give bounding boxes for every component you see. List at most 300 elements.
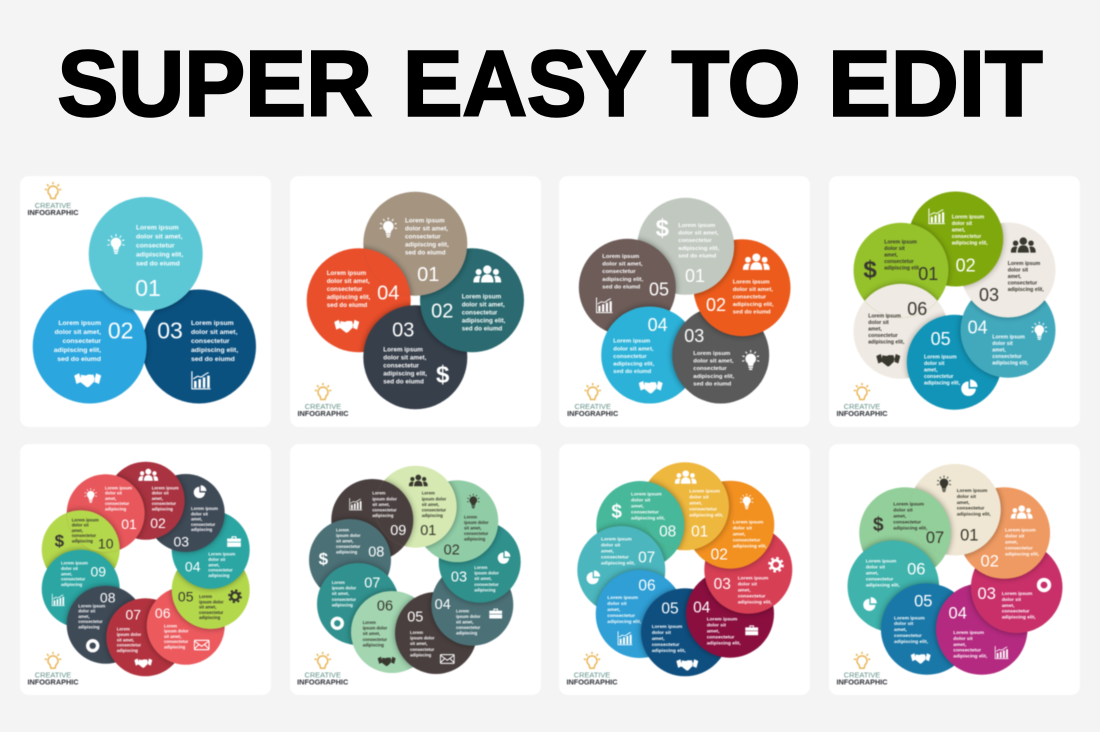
text 03: Lorem ipsum	[383, 347, 423, 354]
panel: eight-step circle diagram	[559, 444, 810, 695]
text 05: ipsum dolor	[199, 599, 224, 604]
text 03: consectetur	[383, 363, 420, 370]
number 07: 07	[364, 575, 380, 591]
text 08: adipiscing	[336, 550, 358, 555]
segment 04	[936, 583, 1028, 675]
text 02: Lorem ipsum	[462, 293, 502, 300]
segment 03	[704, 526, 792, 614]
segment 03	[439, 521, 521, 603]
icon: briefcase	[227, 536, 241, 547]
text 02: Lorem ipsum	[58, 320, 101, 327]
text 01: adipiscing elit,	[957, 512, 991, 518]
number 06: 06	[907, 299, 927, 319]
text 10: adipiscing	[72, 538, 93, 544]
text 03: consectetur	[474, 582, 499, 587]
text 06: amet,	[607, 607, 621, 613]
text 08: amet,	[631, 504, 644, 510]
text 01: dolor sit	[957, 494, 976, 500]
text 03: dolor sit amet,	[693, 359, 734, 365]
text 05: Lorem ipsum	[652, 624, 683, 630]
text 02: adipiscing	[464, 537, 486, 542]
number 02: 02	[444, 543, 460, 559]
number 03: 03	[684, 326, 704, 346]
segment 03	[142, 290, 256, 404]
text 03: adipiscing elit,	[383, 371, 427, 378]
text 08: Lorem	[336, 527, 349, 532]
text 02: Lorem ipsum	[152, 485, 179, 490]
icon: bulb	[1031, 322, 1047, 340]
number 07: 07	[926, 529, 944, 547]
segment 01	[637, 198, 734, 295]
segment 01	[641, 462, 729, 550]
segment 05	[907, 315, 1002, 410]
text 05: adipiscing elit,	[924, 381, 961, 387]
text 08: consectetur	[631, 510, 659, 516]
text 04: dolor sit amet,	[327, 278, 370, 285]
text 03: consectetur	[191, 522, 216, 527]
number 02: 02	[711, 547, 728, 564]
text 06: Lorem ipsum	[607, 595, 639, 601]
segment 02	[694, 239, 790, 336]
text 07: Lorem ipsum	[893, 502, 925, 508]
text 03: consectetur	[1002, 609, 1030, 615]
title: SUPER	[58, 32, 372, 136]
text 05: sit amet,	[410, 641, 427, 646]
title: EDIT	[828, 32, 1042, 136]
segment 08	[308, 517, 392, 588]
segment 06	[348, 588, 415, 674]
text 07: adipiscing elit,	[601, 561, 636, 567]
number 03: 03	[174, 533, 189, 549]
text 01: consectetur	[884, 259, 914, 265]
text 04: adipiscing elit,	[953, 654, 988, 660]
icon: handshake	[676, 659, 698, 671]
text 09: sit amet,	[372, 502, 390, 507]
icon: chart	[928, 208, 945, 224]
number 09: 09	[390, 523, 406, 539]
number 03: 03	[157, 318, 183, 344]
text 05: consectetur	[410, 647, 435, 652]
number 04: 04	[949, 604, 967, 622]
segment 10	[54, 506, 124, 553]
text 05: adipiscing	[199, 615, 221, 620]
icon: bulb	[937, 476, 951, 492]
text 04: sed do eiumd	[613, 369, 652, 375]
segment 02	[416, 480, 498, 562]
text 05: adipiscing	[410, 652, 432, 657]
text 01: consectetur	[689, 507, 717, 513]
number 01: 01	[121, 516, 137, 532]
icon: bulb	[380, 217, 397, 237]
text 04: consectetur	[992, 354, 1022, 360]
icon: dollar: $	[319, 549, 329, 568]
text 03: Lorem	[474, 565, 488, 570]
text 01: adipiscing	[422, 513, 443, 518]
text 01: Lorem ipsum	[136, 224, 179, 231]
icon: handshake	[74, 373, 101, 387]
text 07: ipsum dolor	[117, 632, 142, 637]
segment 07	[859, 487, 951, 579]
text 02: consectetur	[462, 309, 498, 316]
text 03: adipiscing elit,	[1002, 615, 1036, 621]
segment 07	[317, 563, 399, 645]
text 05: consectetur	[199, 610, 224, 615]
text 03: consectetur	[693, 366, 727, 372]
text 01: dolor sit amet,	[136, 233, 183, 240]
text 08: adipiscing	[78, 624, 100, 630]
text 02: consectetur	[733, 294, 767, 300]
segment 05	[595, 236, 680, 314]
icon: chart	[995, 646, 1009, 659]
text 06: Lorem	[164, 623, 177, 628]
text 07: amet,	[893, 514, 907, 520]
text 01: consectetur	[405, 234, 441, 241]
logo: INFOGRAPHIC	[836, 409, 888, 418]
text 05: dolor sit	[924, 361, 945, 367]
text 02: consectetur	[152, 501, 176, 506]
text 10: dolor sit	[72, 523, 89, 528]
icon: pie	[194, 485, 206, 498]
text 07: adipiscing	[332, 602, 353, 607]
icon: gear	[229, 590, 241, 602]
text 03: consectetur	[738, 594, 766, 600]
segment 01	[363, 192, 467, 296]
text 04: adipiscing	[456, 631, 478, 636]
segment 05	[641, 588, 729, 676]
text 04: adipiscing elit,	[707, 641, 741, 647]
text 03: amet,	[191, 517, 202, 522]
text 04: consectetur	[456, 625, 481, 630]
text 02: sed do eiumd	[462, 325, 502, 332]
segment 06	[147, 587, 225, 665]
icon: handshake	[639, 381, 663, 394]
icon: dollar: $	[611, 501, 622, 522]
icon: chart	[191, 371, 211, 389]
text 06: adipiscing elit,	[868, 340, 905, 346]
icon: bulb	[84, 488, 97, 503]
text 05: Lorem	[199, 594, 212, 599]
text 08: consectetur	[336, 544, 361, 549]
text 09: Lorem ipsum	[61, 561, 88, 566]
title: TO	[672, 32, 801, 136]
number 04: 04	[435, 597, 451, 613]
text 03: dolor sit amet,	[383, 355, 427, 362]
text 03: Lorem ipsum	[191, 320, 234, 327]
number 07: 07	[638, 550, 655, 567]
text 06: dolor sit	[868, 320, 889, 326]
title	[58, 32, 1042, 136]
icon: chart	[52, 594, 65, 606]
text 02: dolor sit amet,	[55, 329, 101, 336]
text 06: ipsum dolor	[164, 629, 189, 634]
text 01: Lorem ipsum	[405, 218, 445, 225]
segment 03	[971, 542, 1062, 633]
logo: INFOGRAPHIC	[27, 208, 79, 217]
logo: INFOGRAPHIC	[297, 678, 349, 687]
icon: people	[1011, 505, 1033, 519]
number 05: 05	[407, 609, 423, 625]
text 10: amet,	[72, 528, 83, 533]
number 04: 04	[693, 599, 711, 616]
text 02: Lorem ipsum	[1005, 528, 1036, 534]
text 08: Lorem ipsum	[631, 492, 662, 498]
text 03: Lorem ipsum	[1008, 261, 1041, 267]
text 01: dolor sit	[105, 491, 123, 496]
text 05: ipsum dolor	[410, 636, 435, 641]
text 04: consectetur	[707, 635, 735, 641]
number 05: 05	[914, 593, 932, 611]
panel: nine-step circle diagram	[290, 444, 541, 695]
text 01: adipiscing elit,	[678, 246, 720, 252]
text 02: Lorem	[464, 514, 477, 519]
number 02: 02	[981, 552, 999, 570]
text 02: adipiscing elit,	[54, 347, 101, 354]
text 05: dolor sit amet,	[602, 262, 643, 268]
text 05: dolor sit	[652, 630, 671, 636]
text 06: dolor sit	[866, 565, 885, 571]
number 06: 06	[907, 561, 925, 579]
number 06: 06	[638, 578, 656, 595]
number 04: 04	[648, 315, 668, 335]
icon: pie	[863, 597, 877, 611]
segment 02	[33, 290, 147, 404]
text 08: sit amet,	[336, 538, 353, 544]
logo	[836, 652, 888, 687]
text 01: adipiscing elit,	[405, 242, 449, 249]
icon: people	[473, 265, 501, 282]
text 04: dolor sit	[953, 636, 973, 642]
icon: handshake	[876, 354, 900, 366]
text 03: dolor sit	[191, 511, 209, 516]
logo	[566, 652, 618, 687]
text 08: amet,	[78, 614, 90, 619]
number 04: 04	[377, 282, 399, 304]
number 01: 01	[691, 524, 708, 541]
segment 09	[331, 479, 413, 561]
number 01: 01	[685, 266, 705, 286]
text 05: Lorem ipsum	[602, 254, 639, 260]
number 01: 01	[417, 264, 439, 286]
segment 02	[686, 481, 774, 569]
text 04: Lorem ipsum	[707, 617, 738, 623]
text 07: dolor sit	[601, 543, 621, 549]
segment 06	[863, 280, 939, 368]
text 09: adipiscing	[372, 513, 394, 518]
text 03: adipiscing	[191, 527, 213, 532]
logo: INFOGRAPHIC	[836, 678, 888, 687]
text 01: consectetur	[105, 501, 130, 506]
icon: pie	[587, 570, 600, 584]
text 02: ipsum dolor	[464, 520, 489, 525]
text 03: adipiscing elit,	[1008, 287, 1044, 293]
text 04: consectetur	[953, 648, 981, 654]
text 01: adipiscing elit,	[136, 251, 183, 258]
segment 04	[172, 511, 250, 589]
text 06: amet,	[866, 570, 879, 576]
segment 02	[908, 192, 1003, 286]
panel: four-step circle diagram	[290, 176, 541, 427]
text 02: dolor sit	[952, 221, 972, 227]
text 01: Lorem	[422, 491, 435, 496]
text 04: amet,	[953, 642, 967, 648]
number 02: 02	[956, 256, 976, 276]
segment 04	[601, 306, 698, 404]
number 03: 03	[392, 320, 414, 342]
logo	[27, 652, 79, 687]
text 08: dolor sit	[78, 609, 96, 614]
text 05: sed do eiumd	[602, 284, 641, 290]
segment 02	[420, 248, 524, 352]
text 05: amet,	[924, 368, 938, 374]
segment 01	[375, 466, 457, 548]
text 06: Lorem ipsum	[868, 314, 901, 320]
icon: envelope	[440, 655, 454, 663]
number 01: 01	[960, 527, 978, 545]
text 10: Lorem ipsum	[72, 517, 99, 522]
text 01: Lorem ipsum	[678, 223, 715, 229]
icon: people	[138, 469, 158, 481]
text 03: Lorem ipsum	[191, 506, 218, 511]
segment 05	[168, 570, 250, 633]
icon: dollar: $	[873, 515, 884, 536]
text 05: Lorem ipsum	[924, 355, 957, 361]
text 06: consectetur	[164, 639, 189, 644]
text 08: Lorem ipsum	[78, 603, 105, 608]
text 05: adipiscing elit,	[602, 277, 644, 283]
text 01: dolor sit amet,	[678, 231, 719, 237]
segment 07	[577, 526, 665, 614]
text 04: Lorem ipsum	[327, 270, 367, 277]
icon: chart	[596, 298, 613, 313]
text 02: Lorem ipsum	[952, 215, 985, 221]
logo: INFOGRAPHIC	[567, 409, 619, 418]
text 03: sed do eiumd	[693, 381, 732, 387]
icon: dollar: $	[656, 215, 670, 242]
segment 06	[848, 540, 939, 632]
text 04: sed do eiumd	[327, 302, 367, 309]
text 02: consectetur	[464, 531, 489, 536]
text 07: sit amet,	[117, 637, 134, 642]
text 05: sit amet,	[199, 605, 216, 610]
text 06: adipiscing elit,	[607, 619, 642, 625]
text 06: consectetur	[868, 333, 898, 339]
logo: CREATIVE	[304, 671, 341, 680]
icon: people	[743, 253, 770, 270]
text 05: adipiscing elit,	[894, 639, 929, 645]
panel: ten-step circle diagram	[20, 444, 271, 695]
text 05: consectetur	[924, 374, 953, 380]
text 03: Lorem ipsum	[1002, 591, 1033, 597]
number 01: 01	[420, 523, 436, 539]
text 04: Lorem ipsum	[992, 334, 1025, 340]
text 04: Lorem ipsum	[208, 552, 235, 557]
text 04: ipsum dolor	[456, 614, 481, 619]
text 04: adipiscing	[208, 573, 230, 578]
text 01: amet,	[105, 496, 116, 501]
text 07: consectetur	[117, 643, 141, 648]
text 02: adipiscing elit,	[733, 543, 767, 549]
text 03: Lorem ipsum	[693, 351, 730, 357]
logo: INFOGRAPHIC	[566, 678, 618, 687]
text 01: dolor sit amet,	[405, 226, 448, 233]
icon: envelope	[194, 640, 209, 650]
text 04: Lorem ipsum	[953, 630, 985, 636]
number 05: 05	[931, 329, 951, 349]
text 07: sit amet,	[332, 591, 349, 596]
text 03: adipiscing elit,	[191, 347, 238, 354]
icon: people	[1011, 237, 1036, 253]
text 06: ipsum dolor	[363, 626, 388, 631]
icon: donut	[1039, 580, 1049, 590]
text 02: dolor sit	[1005, 534, 1025, 540]
number 08: 08	[659, 524, 676, 541]
text 04: dolor sit amet,	[613, 346, 654, 352]
text 03: ipsum dolor	[474, 571, 499, 576]
text 09: adipiscing	[61, 582, 83, 587]
text 02: consectetur	[952, 234, 981, 240]
text 03: dolor sit amet,	[191, 329, 238, 336]
logo: INFOGRAPHIC	[27, 678, 79, 687]
text 02: sit amet,	[464, 526, 481, 530]
text 06: consectetur	[363, 637, 387, 642]
segment 03	[147, 474, 225, 552]
segment 01	[909, 464, 1001, 556]
text 02: amet,	[733, 531, 746, 537]
icon: handshake	[334, 320, 359, 333]
segment 08	[67, 586, 145, 664]
icon: chart	[349, 498, 362, 510]
icon: bulb	[742, 350, 759, 370]
text 07: dolor sit	[893, 508, 913, 514]
text 04: Lorem ipsum	[613, 339, 650, 345]
icon: bulb	[107, 234, 125, 254]
icon: gear	[769, 558, 783, 571]
text 05: Lorem	[410, 630, 423, 635]
icon: handshake	[911, 653, 931, 664]
icon: briefcase	[489, 609, 502, 619]
text 07: ipsum dolor	[332, 586, 357, 591]
segment 02	[958, 487, 1050, 579]
text 04: dolor sit	[992, 341, 1013, 347]
text 01: ipsum dolor	[422, 496, 447, 501]
number 10: 10	[98, 535, 114, 551]
text 07: adipiscing	[117, 648, 138, 653]
text 03: consectetur	[1008, 280, 1037, 286]
icon: chart	[618, 631, 632, 645]
text 09: amet,	[61, 571, 72, 576]
number 05: 05	[649, 279, 669, 299]
text 06: Lorem	[363, 620, 376, 625]
text 01: sed do eiumd	[405, 250, 446, 257]
logo: INFOGRAPHIC	[297, 409, 349, 418]
text 03: adipiscing	[474, 587, 496, 592]
text 01: amet,	[957, 500, 970, 506]
text 07: amet,	[601, 549, 614, 555]
text 01: consectetur	[136, 242, 175, 249]
segment 03	[960, 222, 1056, 318]
number 03: 03	[979, 285, 999, 305]
text 05: dolor sit	[894, 621, 914, 627]
number 01: 01	[135, 275, 161, 301]
segment 01	[67, 474, 145, 552]
text 04: adipiscing elit,	[613, 362, 655, 368]
segment 05	[395, 592, 477, 674]
text 07: consectetur	[601, 555, 629, 561]
text 03: sed do eiumd	[383, 379, 424, 386]
logo: CREATIVE	[574, 402, 611, 411]
text 01: dolor sit	[689, 495, 709, 501]
number 02: 02	[431, 301, 453, 323]
